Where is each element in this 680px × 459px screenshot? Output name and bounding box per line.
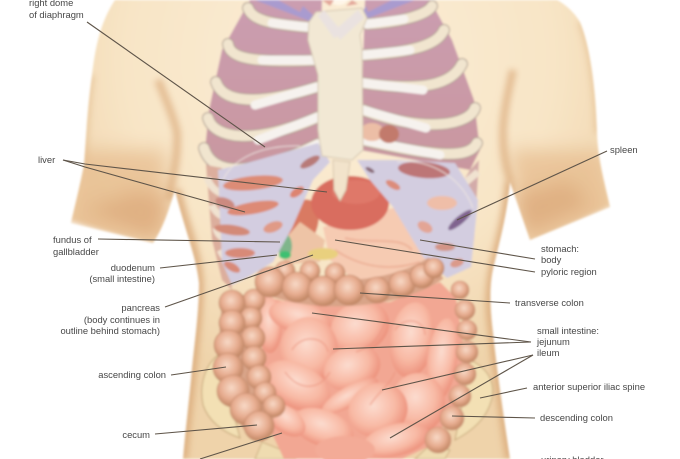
label: small intestine: jejunum [536, 336, 570, 347]
arm end fades [70, 204, 610, 235]
label: duodenum: (small intestine) [89, 273, 155, 284]
label: pancreas: outline behind stomach) [60, 325, 160, 336]
ascending colon and cecum [213, 289, 285, 441]
label: descending colon: descending colon [540, 412, 613, 423]
gallbladder [278, 234, 292, 258]
diaphragm overlay [213, 143, 478, 285]
label: spleen: spleen [610, 144, 638, 155]
lungs [204, 0, 480, 178]
label: stomach: stomach: [541, 243, 579, 254]
label: fundus of gallbladder: gallbladder [53, 246, 99, 257]
label: anterior superior iliac spine: anterior superior iliac spine [533, 381, 645, 392]
illustration: torso anatomy [70, 0, 611, 459]
label: stomach: body [541, 254, 562, 265]
xiphoid process [333, 160, 350, 201]
label: stomach: pyloric region [541, 266, 597, 277]
pancreas [308, 248, 338, 260]
ribs [204, 6, 477, 169]
collar bones and neck notch [318, 0, 364, 40]
label: small intestine: small intestine: [537, 325, 599, 336]
label: ascending colon: ascending colon [98, 369, 166, 380]
label: cecum: cecum [122, 429, 150, 440]
leader lines [63, 22, 607, 459]
transverse colon [255, 258, 444, 306]
label: duodenum: duodenum [111, 262, 155, 273]
sternum [308, 8, 367, 160]
descending colon [425, 281, 478, 453]
label: pancreas: pancreas [121, 302, 160, 313]
right labels [515, 144, 645, 459]
left labels [29, 0, 166, 440]
label: pancreas: (body continues in [84, 314, 160, 325]
lower rib cage sides [206, 160, 479, 290]
liver [311, 176, 389, 230]
body silhouette with skin shading [70, 0, 611, 459]
label: liver: liver [38, 154, 55, 165]
label: right dome of diaphragm: of diaphragm [29, 9, 84, 20]
small intestine [255, 282, 464, 459]
heart [360, 123, 399, 143]
iliac bones [202, 355, 493, 459]
label: fundus of gallbladder: fundus of [53, 234, 92, 245]
label: small intestine: ileum [537, 347, 560, 358]
label: transverse colon: transverse colon [515, 297, 584, 308]
abdominal organs under ribs [278, 176, 430, 282]
